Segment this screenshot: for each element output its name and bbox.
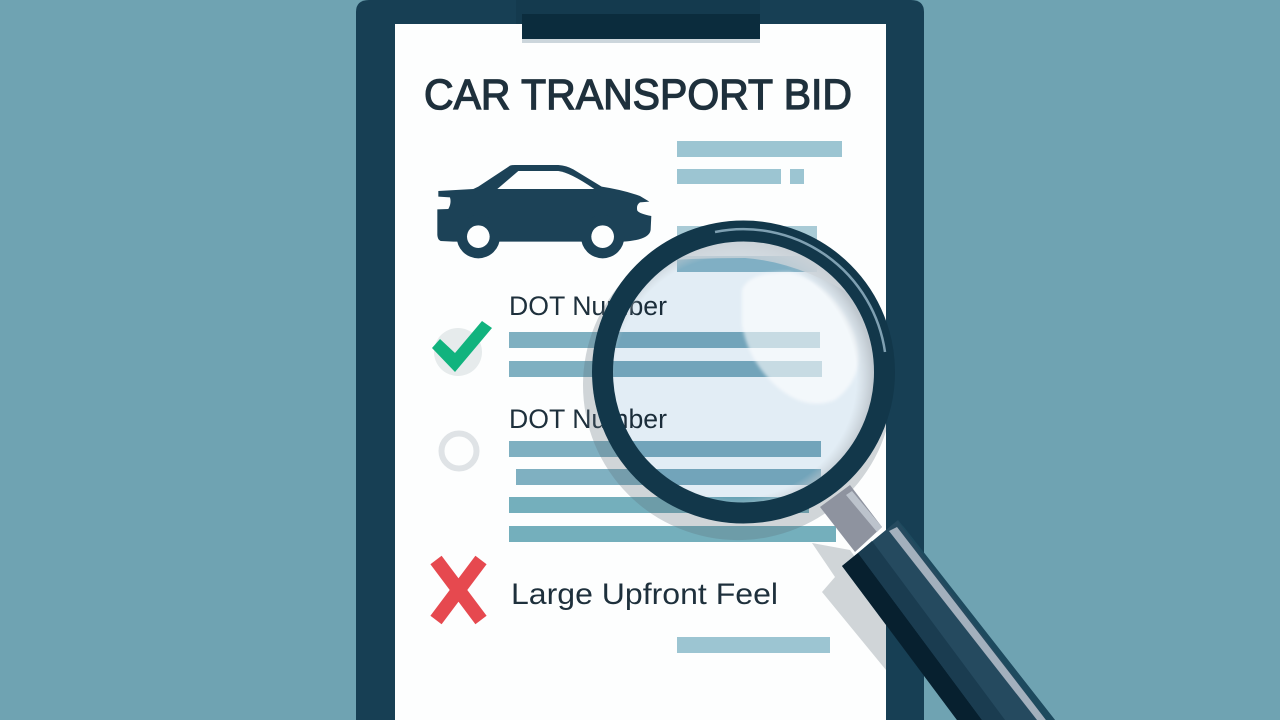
- icon: green check mark: [432, 321, 492, 376]
- infographic: car transport bid clipboard under magnifying glass: [356, 0, 1055, 720]
- title: CAR TRANSPORT BID: [424, 71, 852, 119]
- clipboard clip: [516, 0, 760, 43]
- clipboard board: [356, 0, 924, 720]
- icon: empty circle: [442, 434, 476, 468]
- icon: red cross: [436, 560, 481, 620]
- magnifier handle grip: [842, 520, 1055, 720]
- bottom text bar: [677, 637, 830, 653]
- magnifier shadow on paper: [583, 286, 886, 670]
- label: Large Upfront Feel: Large Upfront Feel: [511, 578, 778, 611]
- label: DOT Number first: DOT Number: [509, 291, 667, 321]
- paper sheet: [395, 24, 886, 720]
- top right text bars: [677, 141, 842, 272]
- magnifying glass tint: [612, 240, 876, 504]
- first group of text bars: [509, 332, 822, 377]
- label: DOT Number second: DOT Number: [509, 404, 667, 434]
- magnifying glass ring: [602, 229, 885, 513]
- second group of text bars: [509, 441, 836, 542]
- lens highlight and rim shading: [612, 240, 876, 504]
- icon: car: [437, 165, 651, 258]
- magnifier handle neck: [820, 485, 882, 552]
